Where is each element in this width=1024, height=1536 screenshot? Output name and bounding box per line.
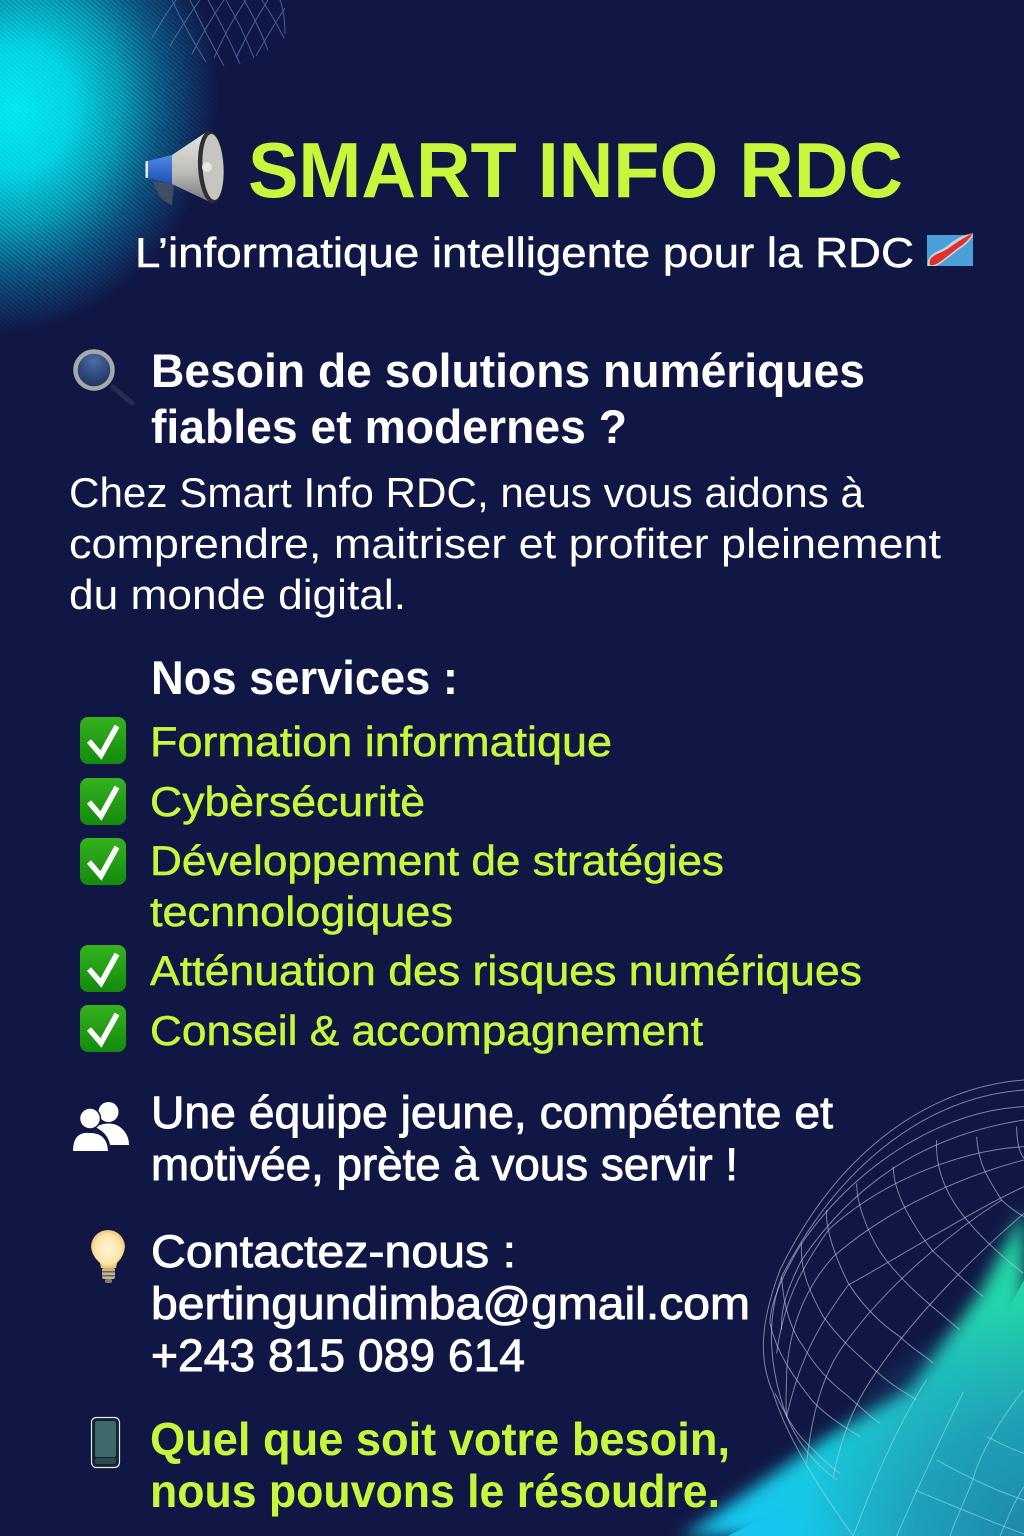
intro paragraph: du monde digital.	[69, 571, 406, 618]
team text: motivée, prète à vous servir !	[151, 1139, 738, 1190]
mesh top left	[152, 0, 285, 66]
team text: Une équipe jeune, compétente et	[151, 1087, 834, 1138]
contact block: +243 815 089 614	[151, 1330, 525, 1381]
team text	[151, 1087, 834, 1190]
closing tagline: nous pouvons le résoudre.	[150, 1465, 720, 1517]
service 2: Cybèrsécuritè	[150, 778, 425, 825]
icon: DRC flag	[927, 233, 973, 266]
service 1: Formation informatique	[150, 718, 612, 765]
closing tagline	[150, 1413, 730, 1517]
icon: megaphone	[146, 130, 226, 205]
teal green glow bottom right	[680, 1210, 1024, 1536]
intro paragraph	[69, 469, 941, 618]
icon: check 1	[80, 717, 126, 764]
contact block	[151, 1226, 750, 1381]
icon: magnifying glass	[76, 352, 132, 403]
icon: check 2	[80, 778, 126, 825]
subtitle: L’informatique intelligente pour la RDC	[135, 229, 914, 276]
icon: check 4	[80, 945, 126, 992]
services list	[80, 717, 862, 1054]
closing tagline: Quel que soit votre besoin,	[150, 1413, 730, 1465]
wireframe globe	[763, 1080, 1024, 1536]
contact block: bertingundimba@gmail.com	[151, 1278, 750, 1329]
heading: services: Nos services :	[151, 651, 458, 704]
icon: check 3	[80, 838, 126, 885]
icon: people	[73, 1102, 129, 1151]
intro paragraph: comprendre, maitriser et profiter pleinement	[69, 520, 941, 567]
contact block: Contactez-nous :	[151, 1226, 516, 1277]
teal glow top left	[0, 0, 213, 328]
intro paragraph: Chez Smart Info RDC, neus vous aidons à	[69, 469, 865, 516]
service 5: Conseil & accompagnement	[150, 1007, 703, 1054]
heading: need: fiables et modernes ?	[151, 400, 627, 453]
icon: check 5	[80, 1005, 126, 1052]
service 3: tecnnologiques	[150, 888, 453, 935]
icon: phone	[92, 1418, 120, 1468]
service 3: Développement de stratégies	[150, 837, 724, 884]
heading: need: Besoin de solutions numériques	[151, 344, 865, 397]
heading: need	[151, 344, 865, 453]
title: SMART INFO RDC	[248, 126, 903, 214]
service 4: Atténuation des risques numériques	[150, 947, 862, 994]
icon: light bulb	[91, 1230, 125, 1283]
service 3	[150, 837, 724, 935]
